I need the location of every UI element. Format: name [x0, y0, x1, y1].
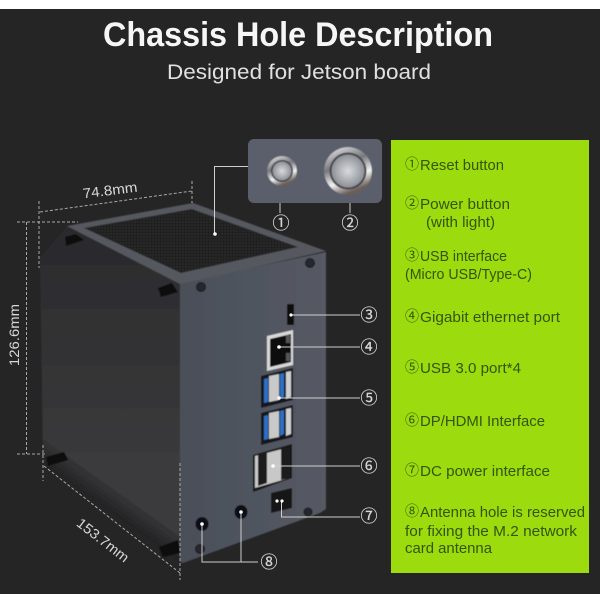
dimension: width	[39, 179, 192, 268]
callout 1: ①	[272, 209, 290, 234]
legend item 3: (Micro USB/Type-C)	[405, 267, 532, 283]
subtitle: Designed for Jetson board	[167, 60, 431, 84]
legend item 5: USB 3.0 port*4	[420, 361, 521, 377]
callout 6	[271, 452, 378, 477]
legend item 8: for fixing the M.2 network	[405, 524, 578, 540]
port: micro usb	[287, 304, 294, 325]
legend item 7	[405, 460, 550, 480]
icon: power button	[324, 147, 372, 195]
callout 4: ④	[360, 333, 378, 358]
legend item 2: (with light)	[426, 215, 495, 231]
legend item 1	[405, 154, 504, 174]
leader: top vent	[213, 166, 248, 236]
legend item 1: Reset button	[420, 158, 504, 174]
legend item 6: ⑥	[405, 410, 419, 430]
dimension: height: 126.6mm	[6, 304, 22, 366]
callout 7	[275, 499, 378, 527]
port: ethernet	[267, 330, 293, 371]
legend item 3: ③	[405, 245, 419, 265]
legend item 4: ④	[405, 306, 419, 326]
callout 5	[277, 384, 378, 409]
legend item 5: ⑤	[405, 357, 419, 377]
front panel	[180, 252, 326, 563]
title: Chassis Hole Description	[103, 16, 493, 54]
legend item 3: USB interface	[420, 249, 507, 265]
port: usb 3.0 stack	[261, 368, 293, 445]
chassis illustration	[40, 203, 326, 563]
dimension: depth: 153.7mm	[74, 515, 132, 565]
dimension: depth	[44, 463, 180, 580]
legend item 6	[405, 410, 545, 430]
legend item 8: card antenna	[405, 541, 493, 557]
side pegs	[46, 234, 180, 557]
callout 3	[289, 301, 378, 326]
dimension: width: 74.8mm	[82, 179, 138, 201]
legend item 8	[405, 501, 585, 557]
callout 6: ⑥	[360, 452, 378, 477]
legend item 2: Power button	[420, 197, 510, 213]
button inset panel	[248, 139, 382, 203]
top mesh	[84, 209, 298, 273]
panel: legend	[391, 140, 589, 573]
legend item 3	[405, 245, 532, 283]
legend item 4: Gigabit ethernet port	[420, 310, 560, 326]
legend item 8: ⑧	[405, 501, 419, 521]
legend item 8: Antenna hole is reserved	[420, 505, 585, 521]
legend item 4	[405, 306, 560, 326]
antenna holes	[196, 505, 248, 531]
legend item 2: ②	[405, 193, 419, 213]
callout 8: ⑧	[260, 548, 278, 573]
legend item 5	[405, 357, 521, 377]
port: dp and hdmi	[253, 444, 292, 492]
callout 7: ⑦	[360, 502, 378, 527]
callout 8	[200, 510, 278, 573]
port: dc power	[271, 488, 292, 513]
left side panel	[40, 226, 181, 562]
front screws	[196, 258, 314, 554]
callout 3: ③	[360, 301, 378, 326]
callout 4	[277, 333, 378, 358]
icon: reset button	[267, 156, 297, 186]
callout 2: ②	[342, 209, 358, 234]
callout 5: ⑤	[360, 384, 378, 409]
legend item 1: ①	[405, 154, 419, 174]
legend item 6: DP/HDMI Interface	[420, 414, 545, 430]
lower shadow band	[43, 439, 181, 562]
legend item 7: DC power interface	[420, 464, 550, 480]
legend item 7: ⑦	[405, 460, 419, 480]
legend item 2	[405, 193, 510, 231]
top frame	[67, 203, 326, 284]
